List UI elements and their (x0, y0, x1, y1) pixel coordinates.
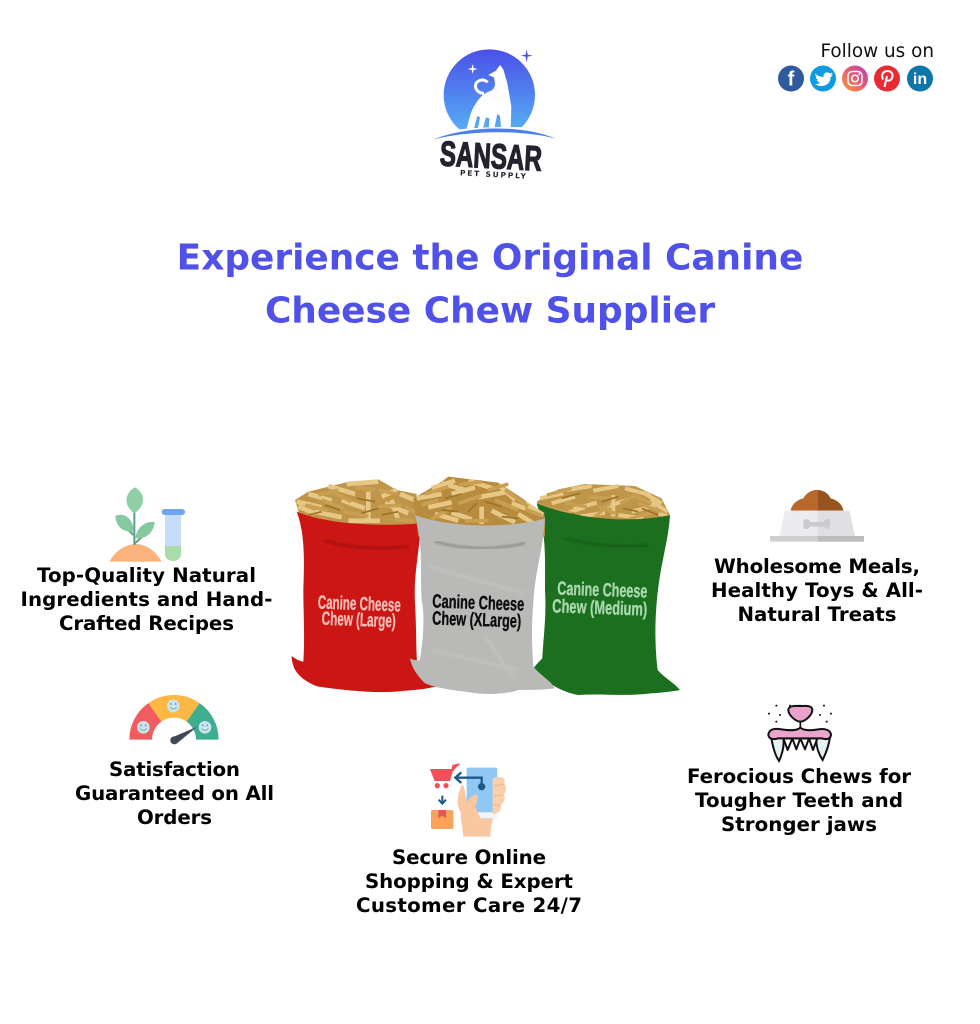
feature text: Tougher Teeth and (695, 789, 903, 812)
feature text: Guaranteed on All (75, 782, 274, 805)
icon: twitter (810, 66, 836, 92)
grey sack body (410, 515, 555, 694)
grey sack chews (413, 477, 545, 537)
label: xlarge sack: Canine Cheese (432, 591, 525, 616)
icon: satisfaction gauge (137, 700, 211, 744)
label: large sack: Canine Cheese (317, 593, 401, 616)
feature text: Ferocious Chews for (687, 765, 911, 788)
label: large sack: Chew (Large) (321, 609, 396, 632)
feature text: Wholesome Meals, (714, 555, 920, 578)
red sack body (292, 512, 436, 692)
feature: wholesome meals (711, 490, 923, 626)
feature text: Satisfaction (109, 758, 240, 781)
label: large sack (317, 593, 401, 632)
feature text: Secure Online (392, 846, 546, 869)
red sack chews (295, 479, 417, 533)
label: medium sack: Chew (Medium) (552, 596, 648, 621)
logo: Sansar Pet Supply (433, 49, 556, 181)
icon: linkedin (907, 66, 933, 92)
feature text (75, 758, 274, 829)
feature text (687, 765, 911, 836)
infographic page (22, 43, 933, 914)
icon: facebook (778, 66, 804, 92)
icon: plant and test tube (109, 487, 185, 562)
title (177, 238, 803, 332)
social follow block (778, 41, 934, 92)
logo tagline: PET SUPPLY (460, 168, 527, 181)
label: medium sack: Canine Cheese (557, 579, 648, 603)
feature text: Orders (137, 806, 212, 829)
green sack chews (537, 484, 670, 533)
feature: ferocious chews (687, 705, 911, 836)
feature: online shopping (356, 764, 582, 917)
icon: linkedin: in (913, 71, 927, 88)
feature text: Stronger jaws (721, 813, 877, 836)
product: three sacks of cheese chews (292, 477, 680, 695)
sack group artwork (292, 477, 680, 695)
feature: natural ingredients (20, 487, 272, 635)
icon: food bowl (770, 490, 864, 542)
feature text: Crafted Recipes (59, 612, 234, 635)
icon: pinterest (874, 66, 900, 92)
green sack body (533, 503, 680, 695)
label: xlarge sack: Chew (XLarge) (432, 608, 522, 633)
feature text: Customer Care 24/7 (356, 894, 582, 917)
feature text: Ingredients and Hand- (20, 588, 272, 611)
title line 1: Experience the Original Canine (177, 238, 803, 278)
feature text: Natural Treats (738, 603, 896, 626)
logo wordmark: SANSAR (439, 134, 543, 179)
logo badge with dog (433, 49, 556, 141)
icon: facebook: f (788, 68, 795, 90)
label: xlarge sack (431, 591, 525, 633)
title line 2: Cheese Chew Supplier (265, 291, 715, 332)
feature text: Healthy Toys & All- (711, 579, 923, 602)
icon: canine teeth (768, 705, 832, 761)
feature text: Top-Quality Natural (37, 564, 256, 587)
feature text (356, 846, 582, 917)
feature text (711, 555, 923, 626)
follow us label: Follow us on (820, 41, 934, 62)
icon: phone shopping (431, 764, 506, 837)
feature text: Shopping & Expert (365, 870, 573, 893)
label: medium sack (552, 578, 648, 621)
feature: satisfaction guaranteed (75, 700, 274, 829)
feature text (20, 564, 272, 635)
icon: instagram (842, 66, 868, 92)
